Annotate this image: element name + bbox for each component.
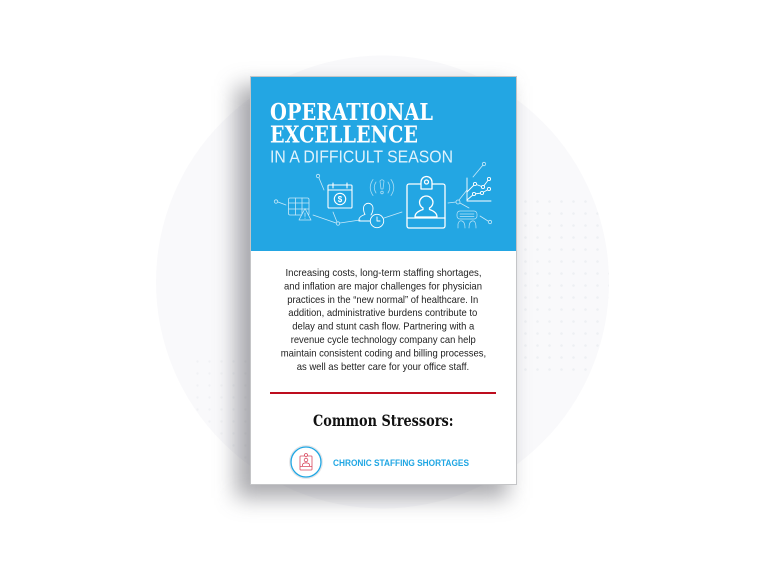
icon: hands on keyboard (457, 211, 477, 228)
icon: staffing badge in circle (289, 445, 323, 479)
text block: introduction: practices in the “new normal” of healthcare. In (287, 295, 478, 306)
title: EXCELLENCE (270, 122, 418, 148)
icon: ID badge (407, 177, 445, 228)
title (270, 99, 433, 148)
icon: person with clock (359, 203, 384, 228)
icon: calendar with dollar (328, 183, 352, 208)
panel: blue header (251, 77, 516, 251)
icon: calendar with dollar: $ (338, 195, 343, 204)
text block: introduction: delay and stunt cash flow. Partnering with a (292, 322, 474, 333)
header title and illustration (270, 99, 492, 229)
icon: line chart (467, 177, 491, 201)
background circle with dot pattern (196, 200, 609, 458)
icon: table with warning (288, 198, 311, 220)
text block: introduction: Increasing costs, long-term staffing shortages, (286, 268, 482, 279)
panel: document card (251, 77, 516, 484)
subtitle: IN A DIFFICULT SEASON (270, 146, 453, 166)
divider: red rule (270, 392, 496, 394)
text block: introduction: maintain consistent coding and billing processes, (281, 348, 486, 359)
text block: introduction: as well as better care for your office staff. (297, 362, 469, 373)
title: OPERATIONAL (270, 99, 433, 126)
card drop shadow (236, 86, 508, 498)
text block: introduction: addition, administrative burdens contribute to (288, 308, 477, 319)
text block: introduction: and inflation are major challenges for physician (284, 281, 482, 292)
network connector lines (274, 162, 492, 225)
text block: introduction: revenue cycle technology company can help (291, 335, 476, 346)
icon: alert signal (370, 180, 394, 196)
heading: common stressors: Common Stressors: (313, 411, 454, 430)
text block: introduction (281, 268, 486, 373)
